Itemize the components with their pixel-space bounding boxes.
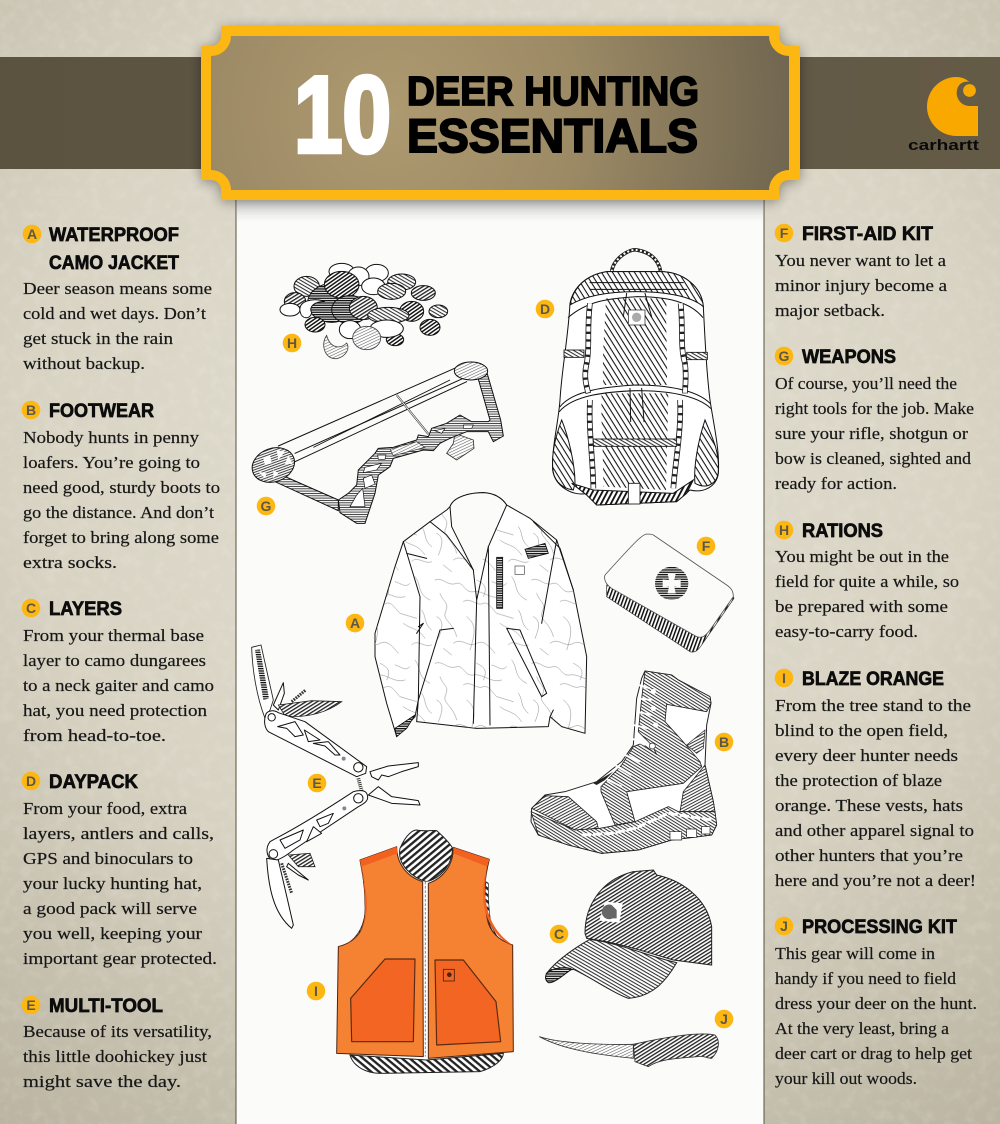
item A: waterproof camo jacket: Deer season means some — [23, 279, 212, 298]
panel: centre illustration sheet — [236, 170, 764, 1124]
badge H — [283, 334, 301, 352]
item C: layers: hat, you need protection — [23, 701, 208, 720]
item H: rations — [775, 520, 959, 641]
title plaque: DEER HUNTING — [407, 68, 699, 114]
icon: first-aid kit — [605, 534, 734, 652]
badge E — [308, 774, 326, 792]
item A: waterproof camo jacket: get stuck in the rain — [23, 329, 174, 348]
item I: blaze orange: here and you’re not a deer! — [775, 871, 976, 890]
item F: first-aid kit: F — [780, 225, 789, 241]
item D: daypack: your lucky hunting hat, — [23, 874, 202, 893]
item A: waterproof camo jacket: WATERPROOF — [49, 224, 179, 246]
item E: multi-tool: MULTI-TOOL — [49, 995, 163, 1017]
item F: first-aid kit: minor injury become a — [775, 276, 948, 295]
item B: footwear: FOOTWEAR — [49, 400, 154, 422]
badges on illustrations — [257, 300, 733, 1028]
item E: multi-tool: this little doohickey just — [23, 1047, 207, 1066]
icon: rations pile — [280, 263, 448, 359]
item J: processing kit: dress your deer on the hunt. — [775, 994, 977, 1013]
item D: daypack: From your food, extra — [23, 799, 187, 818]
item J: processing kit: PROCESSING KIT — [802, 916, 957, 938]
icon: multi-tool — [252, 645, 420, 928]
item D: daypack: D — [26, 773, 36, 789]
item F: first-aid kit: major setback. — [775, 301, 885, 320]
badge F — [697, 537, 715, 555]
panel: right column items — [775, 223, 977, 1088]
item A: waterproof camo jacket — [23, 224, 212, 373]
badge I: I — [314, 983, 318, 999]
icon: blaze orange vest — [337, 830, 513, 1073]
item A: waterproof camo jacket: A — [27, 226, 37, 242]
badge I — [307, 982, 325, 1000]
badge D — [536, 300, 554, 318]
title plaque: 10 — [294, 54, 391, 176]
item G: weapons: sure your rifle, shotgun or — [775, 424, 968, 443]
item D: daypack: layers, antlers and calls, — [23, 824, 214, 843]
item A: waterproof camo jacket: cold and wet days. Don’t — [23, 304, 206, 323]
icon: compound bow — [247, 362, 503, 523]
icon: daypack — [553, 250, 719, 505]
item F: first-aid kit: You never want to let a — [775, 251, 946, 270]
item D: daypack — [22, 771, 217, 968]
item D: daypack: you well, keeping your — [23, 924, 202, 943]
item J: processing kit: handy if you need to field — [775, 969, 957, 988]
item I: blaze orange — [775, 668, 976, 890]
item C: layers — [22, 598, 214, 745]
badge A: A — [350, 615, 360, 631]
item G: weapons: WEAPONS — [802, 346, 896, 368]
item B: footwear: need good, sturdy boots to — [23, 478, 220, 497]
item C: layers: layer to camo dungarees — [23, 651, 206, 670]
icon: camo jacket — [375, 493, 587, 737]
item F: first-aid kit — [775, 223, 948, 320]
badge D: D — [540, 301, 550, 317]
item H: rations: RATIONS — [802, 520, 883, 542]
badge B — [715, 733, 733, 751]
item I: blaze orange: the protection of blaze — [775, 771, 942, 790]
icon: cap — [546, 870, 712, 998]
item G: weapons — [775, 346, 974, 493]
badge E: E — [312, 775, 322, 791]
item B: footwear: B — [26, 402, 36, 418]
item J: processing kit — [775, 916, 977, 1088]
item I: blaze orange: I — [782, 670, 786, 686]
badge J: J — [720, 1011, 728, 1027]
item E: multi-tool — [22, 995, 212, 1091]
item I: blaze orange: orange. These vests, hats — [775, 796, 963, 815]
item C: layers: From your thermal base — [23, 626, 204, 645]
item H: rations: easy-to-carry food. — [775, 622, 918, 641]
item C: layers: C — [26, 600, 36, 616]
item H: rations: field for quite a while, so — [775, 572, 959, 591]
Carhartt logo — [908, 77, 979, 154]
item J: processing kit: This gear will come in — [775, 944, 936, 963]
item D: daypack: important gear protected. — [23, 949, 217, 968]
badge G — [257, 497, 275, 515]
item H: rations: You might be out in the — [775, 547, 949, 566]
title plaque: ESSENTIALS — [407, 109, 698, 162]
badge C: C — [554, 926, 564, 942]
item I: blaze orange: every deer hunter needs — [775, 746, 958, 765]
item G: weapons: bow is cleaned, sighted and — [775, 449, 972, 468]
item B: footwear: extra socks. — [23, 553, 117, 572]
item E: multi-tool: Because of its versatility, — [23, 1022, 212, 1041]
item B: footwear: loafers. You’re going to — [23, 453, 200, 472]
badge A — [346, 614, 364, 632]
item J: processing kit: J — [780, 918, 788, 934]
item I: blaze orange: blind to the open field, — [775, 721, 948, 740]
title plaque — [201, 26, 800, 202]
item D: daypack: DAYPACK — [49, 771, 138, 793]
item B: footwear: forget to bring along some — [23, 528, 219, 547]
item I: blaze orange: BLAZE ORANGE — [802, 668, 944, 690]
item H: rations: H — [779, 522, 789, 538]
badge F: F — [702, 538, 711, 554]
icon: boot — [531, 671, 717, 853]
item G: weapons: G — [779, 348, 790, 364]
badge J — [715, 1010, 733, 1028]
item G: weapons: ready for action. — [775, 474, 897, 493]
item H: rations: be prepared with some — [775, 597, 948, 616]
item B: footwear: go the distance. And don’t — [23, 503, 214, 522]
item E: multi-tool: E — [26, 997, 36, 1013]
item J: processing kit: At the very least, bring a — [775, 1019, 949, 1038]
panel: left column items — [22, 224, 220, 1091]
badge C — [550, 925, 568, 943]
item F: first-aid kit: FIRST-AID KIT — [802, 223, 933, 245]
badge B: B — [719, 734, 729, 750]
item C: layers: LAYERS — [49, 598, 122, 620]
Carhartt logo: carhartt — [908, 137, 979, 154]
item I: blaze orange: and other apparel signal to — [775, 821, 974, 840]
item G: weapons: Of course, you’ll need the — [775, 374, 957, 393]
item J: processing kit: deer cart or drag to help get — [775, 1044, 972, 1063]
item D: daypack: GPS and binoculars to — [23, 849, 193, 868]
item A: waterproof camo jacket: without backup. — [23, 354, 145, 373]
item I: blaze orange: From the tree stand to the — [775, 696, 971, 715]
badge H: H — [287, 335, 297, 351]
icon: knife — [539, 1034, 718, 1067]
item G: weapons: right tools for the job. Make — [775, 399, 974, 418]
item C: layers: to a neck gaiter and camo — [23, 676, 214, 695]
item B: footwear — [22, 400, 220, 572]
item E: multi-tool: might save the day. — [23, 1072, 181, 1091]
item A: waterproof camo jacket: CAMO JACKET — [49, 252, 179, 274]
badge G: G — [261, 498, 272, 514]
item D: daypack: a good pack will serve — [23, 899, 197, 918]
item J: processing kit: your kill out woods. — [775, 1069, 917, 1088]
item C: layers: from head-to-toe. — [23, 726, 166, 745]
item I: blaze orange: other hunters that you’re — [775, 846, 963, 865]
item B: footwear: Nobody hunts in penny — [23, 428, 200, 447]
header band — [0, 57, 1000, 169]
